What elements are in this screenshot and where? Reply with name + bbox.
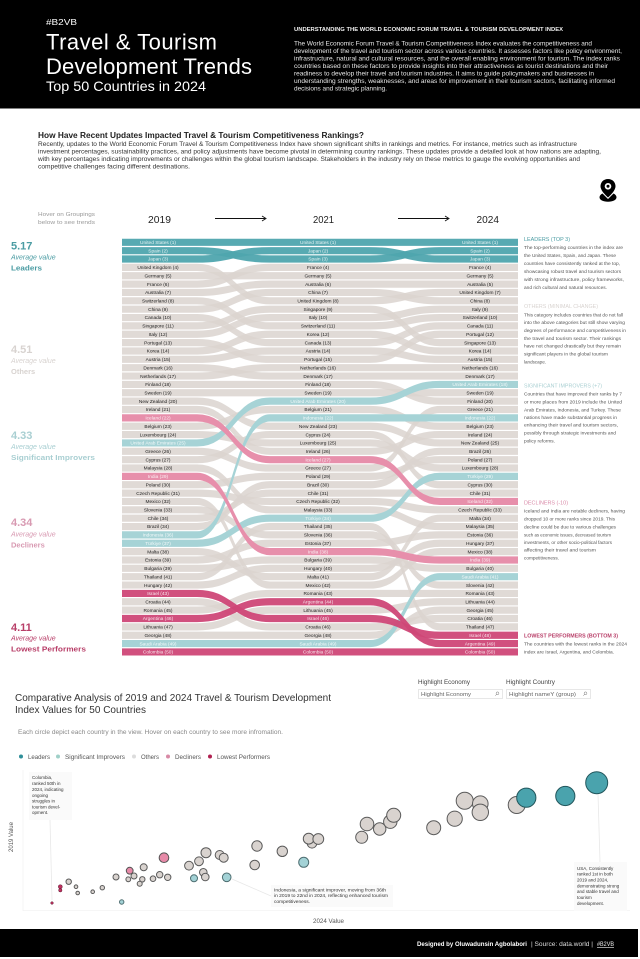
scatter x axis label: 2024 Value xyxy=(313,919,345,925)
callout: Colombia: 2024, indicating xyxy=(32,787,64,792)
note: others: the travel and tourism sector. Their rankings xyxy=(524,336,622,341)
country labels 2024: Malaysia (35) xyxy=(466,524,495,530)
country labels 2019: Cyprus (27) xyxy=(145,457,171,463)
footer banner: Designed by Oluwadunsin Agbolabori xyxy=(417,941,527,948)
hover instruction: below to see trends xyxy=(38,220,95,226)
country labels 2021: United Arab Emirates (20) xyxy=(290,399,346,405)
sankey ribbons: leaders xyxy=(122,242,518,259)
country labels 2021: Belgium (21) xyxy=(304,407,332,413)
note: lowest performers: The countries with the lowest ranks in the 2024 xyxy=(524,641,627,646)
country labels 2024: Lithuania (44) xyxy=(465,600,495,606)
country labels 2019: Sweden (19) xyxy=(144,390,172,396)
country labels 2024: Czech Republic (33) xyxy=(458,508,502,514)
country labels 2019: Estonia (39) xyxy=(145,558,171,564)
country labels 2019: Slovenia (33) xyxy=(144,508,173,514)
country labels 2019: United Arab Emirates (25) xyxy=(130,441,186,447)
country labels 2021: France (4) xyxy=(307,265,329,271)
country labels 2021: Germany (5) xyxy=(305,273,332,279)
country labels 2024: Hungary (37) xyxy=(466,541,494,547)
country labels 2019: Saudi Arabia (49) xyxy=(139,641,177,647)
header intro text: infrastructure, natural and cultural resources, and the overall enabling environment for tourism. The index ranks xyxy=(294,57,620,63)
country labels 2021: Finland (18) xyxy=(305,382,331,388)
section heading and description: investment percentages, sustainability practices, and policy adjustments have become pivotal in determining country rankings. These updates provide a detailed look at how nations are adapting, xyxy=(38,150,601,156)
country labels 2021: Thailand (35) xyxy=(304,524,333,530)
filter: highlight economy: Highlight Economy xyxy=(421,692,471,698)
country labels 2021: Luxembourg (25) xyxy=(300,441,337,447)
country labels 2019: Thailand (41) xyxy=(144,574,173,580)
KPI: lowest performers: Average value xyxy=(10,636,56,642)
country labels 2021: Saudi Arabia (49) xyxy=(299,641,337,647)
year headers with arrows xyxy=(148,214,499,226)
note: decliners: Iceland and India are notable decliners, having xyxy=(524,508,625,513)
scatter legend xyxy=(19,754,270,761)
header intro text: UNDERSTANDING THE WORLD ECONOMIC FORUM TRAVEL & TOURISM DEVELOPMENT INDEX xyxy=(294,27,563,33)
note: leaders: and rich cultural and natural resources. xyxy=(524,285,607,290)
country labels 2024: Austria (15) xyxy=(468,357,493,363)
section heading and description xyxy=(37,131,601,170)
year headers with arrows: 2024 xyxy=(476,214,499,226)
country labels 2019: Georgia (48) xyxy=(145,633,172,639)
note: lowest performers: LOWEST PERFORMERS (BOTTOM 3) xyxy=(524,634,618,640)
country labels 2019: Switzerland (8) xyxy=(142,298,174,304)
scatter legend: Others xyxy=(141,755,159,761)
note: significant improvers: SIGNIFICANT IMPROVERS (+7) xyxy=(524,383,602,389)
country labels 2021: Switzerland (11) xyxy=(301,324,336,330)
country labels 2019: Colombia (50) xyxy=(143,650,173,656)
country labels 2019: Belgium (23) xyxy=(144,424,172,430)
country labels 2021: Canada (13) xyxy=(305,340,332,346)
scatter points: significant improvers xyxy=(120,857,309,904)
note: leaders: countries have consistently ranked at the top, xyxy=(524,261,620,266)
country labels 2019: Romania (45) xyxy=(143,608,173,614)
KPI: leaders: Leaders xyxy=(11,264,42,272)
country labels 2024: Denmark (17) xyxy=(465,374,495,380)
country labels 2021: Mexico (42) xyxy=(305,583,331,589)
country labels 2021: Poland (29) xyxy=(306,474,331,480)
filter: highlight country xyxy=(506,680,590,698)
note: leaders: the United States, Spain, and Japan. These xyxy=(524,253,616,258)
note: others: into the above categories but still show varying xyxy=(524,320,625,325)
country labels 2024: Iceland (32) xyxy=(467,499,493,505)
country labels 2024: United Arab Emirates (18) xyxy=(452,382,508,388)
KPI: significant improvers xyxy=(10,430,95,462)
country labels 2024: Switzerland (10) xyxy=(463,315,498,321)
country labels 2021: Brazil (30) xyxy=(307,482,329,488)
KPI: others: Others xyxy=(11,367,35,376)
country labels 2019: Mexico (32) xyxy=(145,499,171,505)
country labels 2019 xyxy=(130,240,186,656)
country labels 2024: Japan (3) xyxy=(470,257,491,263)
callout: USA: USA, Consistently xyxy=(577,866,614,871)
country labels 2019: Canada (10) xyxy=(145,315,172,321)
country labels 2021: Colombia (50) xyxy=(303,650,333,656)
note: others: landscape. xyxy=(524,360,546,365)
country labels 2019: Argentina (46) xyxy=(143,616,174,622)
KPI: decliners: Average value xyxy=(10,532,56,538)
note: significant improvers: possibly through strategic investments and xyxy=(524,430,616,435)
country labels 2019: Croatia (44) xyxy=(145,600,171,606)
country labels 2019: Finland (18) xyxy=(145,382,171,388)
callout: USA: 2019 and 2024, xyxy=(577,878,608,882)
sankey ribbons: significant improvers xyxy=(122,384,518,644)
country labels 2021: Romania (43) xyxy=(303,591,333,597)
country labels 2019: Malaysia (28) xyxy=(144,466,173,472)
country labels 2021: Singapore (9) xyxy=(303,307,333,313)
header intro text: countries based on these factors to provide insights into their attractiveness as tourist destinations and their xyxy=(294,64,608,70)
country labels 2024: France (4) xyxy=(469,265,491,271)
country labels 2019: New Zealand (20) xyxy=(139,399,177,405)
note: others: significant players in the global tourism xyxy=(524,352,608,357)
note: decliners xyxy=(524,500,625,561)
callout: Colombia: tourism devel- xyxy=(32,804,61,810)
country labels 2024: Cyprus (30) xyxy=(467,482,493,488)
country labels 2021: Denmark (17) xyxy=(303,374,333,380)
country labels 2021: Australia (6) xyxy=(305,282,331,288)
footer banner: #B2VB xyxy=(597,941,614,948)
callout: Colombia: ongoing xyxy=(32,793,49,798)
country labels 2019: Lithuania (47) xyxy=(143,625,173,631)
note: leaders: The top-performing countries in the index are xyxy=(524,245,623,250)
KPI: decliners: 4.34 xyxy=(11,517,33,529)
country labels 2021: Bulgaria (39) xyxy=(304,558,332,564)
callout: USA: development. xyxy=(577,901,604,906)
country labels 2021: Austria (14) xyxy=(306,349,331,355)
country labels 2024: Bulgaria (40) xyxy=(466,566,494,572)
note: others: OTHERS (MINIMAL CHANGE) xyxy=(524,304,598,310)
country labels 2024: China (8) xyxy=(470,298,490,304)
country labels 2019: Netherlands (17) xyxy=(140,374,176,380)
header banner xyxy=(0,0,640,108)
country labels 2024 xyxy=(452,240,508,656)
country labels 2019: Denmark (16) xyxy=(143,365,173,371)
scatter points: leaders xyxy=(517,772,608,807)
country labels 2024: Estonia (36) xyxy=(467,533,493,539)
country labels 2024: Chile (31) xyxy=(470,491,491,497)
country labels 2021: Hungary (40) xyxy=(304,566,332,572)
note: leaders: LEADERS (TOP 3) xyxy=(524,237,570,243)
country labels 2021: Israel (46) xyxy=(307,616,329,622)
country labels 2021: Estonia (37) xyxy=(305,541,331,547)
country labels 2021: Chile (31) xyxy=(308,491,329,497)
country labels 2019: United States (1) xyxy=(140,240,176,246)
country labels 2021: Malaysia (33) xyxy=(304,508,333,514)
country labels 2019: Hungary (42) xyxy=(144,583,172,589)
country labels 2024: Belgium (23) xyxy=(466,424,494,430)
header intro text xyxy=(294,27,622,93)
country labels 2024: Malta (34) xyxy=(469,516,491,522)
country labels 2024: Finland (20) xyxy=(467,399,493,405)
KPI: significant improvers: Average value xyxy=(10,444,56,451)
callout: USA: tourism xyxy=(577,895,592,900)
country labels 2019: Indonesia (36) xyxy=(143,533,174,539)
section heading and description: Recently, updates to the World Economic Forum Travel & Tourism Competitiveness Index have shown significant shifts in rankings and metrics. For instance, metrics such as infrastructure xyxy=(38,142,578,148)
country labels 2021: Sweden (19) xyxy=(304,390,332,396)
country labels 2024: Sweden (19) xyxy=(466,390,494,396)
KPI: decliners: Decliners xyxy=(11,540,45,550)
KPI: others xyxy=(10,344,56,376)
note: significant improvers xyxy=(524,383,622,443)
filter: highlight country: Highlight nameY (group) xyxy=(509,692,576,698)
main title block: Travel & Tourism xyxy=(46,30,217,54)
country labels 2021: Croatia (46) xyxy=(305,625,331,631)
note: decliners: DECLINERS (-10) xyxy=(524,500,568,506)
country labels 2024: Canada (11) xyxy=(467,324,494,330)
KPI: lowest performers: 4.11 xyxy=(11,622,32,634)
sankey ribbons: lowest performers xyxy=(122,593,518,652)
KPI: leaders: 5.17 xyxy=(11,240,32,252)
note: decliners: competitiveness. xyxy=(524,556,559,561)
country labels 2024: Greece (21) xyxy=(467,407,493,413)
country labels 2021: Korea (12) xyxy=(307,332,330,338)
country labels 2019: Poland (30) xyxy=(146,482,171,488)
scatter points: others xyxy=(66,792,525,895)
country labels 2021: China (7) xyxy=(308,290,328,296)
header intro text: The World Economic Forum Travel & Tourism Competitiveness Index evaluates the competitiveness and xyxy=(294,42,592,48)
country labels 2019: India (29) xyxy=(148,474,169,480)
country labels 2021: Portugal (15) xyxy=(304,357,332,363)
hover instruction xyxy=(38,212,95,226)
country labels 2024: Croatia (46) xyxy=(467,616,493,622)
section heading and description: How Have Recent Updates Impacted Travel & Tourism Competitiveness Rankings? xyxy=(38,131,364,140)
filter: highlight economy: Highlight Economy xyxy=(418,680,470,686)
country labels 2021: Netherlands (16) xyxy=(300,365,336,371)
note: lowest performers xyxy=(524,634,627,654)
callout: Indonesia: Indonesia, a significant improver, moving from 36th xyxy=(274,888,387,892)
filter: highlight economy xyxy=(418,680,502,698)
scatter title: Comparative Analysis of 2019 and 2024 Travel & Tourism Development xyxy=(15,692,331,704)
note: leaders: showcasing robust travel and tourism sectors xyxy=(524,269,622,274)
country labels 2021: United States (1) xyxy=(300,240,336,246)
main title block xyxy=(46,17,252,94)
country labels 2019: Brazil (34) xyxy=(147,524,169,530)
country labels 2019: Ireland (21) xyxy=(146,407,171,413)
KPI: lowest performers: Lowest Performers xyxy=(11,644,86,654)
country labels 2021: Czech Republic (32) xyxy=(296,499,340,505)
section heading and description: with key percentages indicating improvements or challenges within the global tourism landscape. Stakeholders in the industry rely on these metrics to gauge the evolving opportunities and xyxy=(37,157,580,163)
country labels 2021: United Kingdom (8) xyxy=(297,298,339,304)
country labels 2024: Mexico (38) xyxy=(467,549,493,555)
country labels 2021: India (38) xyxy=(308,549,329,555)
KPI: significant improvers: Significant Improvers xyxy=(11,453,95,462)
main title block: Top 50 Countries in 2024 xyxy=(46,78,206,94)
country labels 2021: Japan (2) xyxy=(308,248,329,254)
section heading and description: competitive challenges facing different destinations. xyxy=(38,164,190,170)
KPI: leaders: Average value xyxy=(10,254,56,262)
country labels 2019: Luxembourg (24) xyxy=(140,432,177,438)
year headers with arrows: 2021 xyxy=(313,214,334,226)
callout: USA xyxy=(574,862,627,911)
country labels 2021 xyxy=(290,240,346,656)
note: decliners: such as economic issues, decreased tourism xyxy=(524,532,611,537)
main title block: Development Trends xyxy=(46,54,252,79)
note: others xyxy=(524,304,626,365)
callout: Colombia: ranked 50th in xyxy=(32,781,61,786)
country labels 2019: Czech Republic (31) xyxy=(136,491,180,497)
note: others: This category includes countries that do not fall xyxy=(524,312,623,317)
callout: USA: and stable travel and xyxy=(577,889,619,894)
country labels 2024: Romania (43) xyxy=(465,591,495,597)
country labels 2024: Portugal (12) xyxy=(466,332,494,338)
country labels 2024: Georgia (45) xyxy=(467,608,494,614)
footer banner: | Source: data.world | xyxy=(531,941,593,948)
country labels 2021: Argentina (44) xyxy=(303,600,334,606)
country labels 2019: United Kingdom (4) xyxy=(137,265,179,271)
country labels 2019: Japan (3) xyxy=(148,257,169,263)
country labels 2019: Malta (38) xyxy=(147,549,169,555)
KPI: others: Average value xyxy=(10,358,56,365)
filter: highlight country: Highlight Country xyxy=(506,680,555,686)
country labels 2024: India (39) xyxy=(470,558,491,564)
note: others: have not changed drastically but they remain xyxy=(524,344,621,349)
country labels 2019: Iceland (22) xyxy=(145,416,171,422)
country labels 2024: Türkiye (29) xyxy=(467,474,493,480)
icon: map pin xyxy=(600,179,616,202)
note: leaders: with strong infrastructure, policy frameworks, xyxy=(524,277,624,282)
country labels 2019: Australia (7) xyxy=(145,290,171,296)
KPI: decliners xyxy=(10,517,56,550)
country labels 2019: Korea (14) xyxy=(147,349,170,355)
country labels 2021: Ireland (26) xyxy=(306,449,331,455)
KPI: significant improvers: 4.33 xyxy=(11,430,32,442)
callout: USA: demonstrating strong xyxy=(577,884,620,888)
country labels 2019: Italy (12) xyxy=(149,332,168,338)
country labels 2019: Greece (26) xyxy=(145,449,171,455)
country labels 2024: Singapore (13) xyxy=(464,340,496,346)
country labels 2024: Israel (48) xyxy=(469,633,491,639)
country labels 2019: Portugal (13) xyxy=(144,340,172,346)
country labels 2024: Poland (27) xyxy=(468,457,493,463)
note: leaders xyxy=(524,237,624,290)
callout: Colombia: opment. xyxy=(32,810,48,815)
country labels 2024: Argentina (49) xyxy=(465,641,496,647)
footer banner xyxy=(0,929,638,957)
country labels 2024: Colombia (50) xyxy=(465,650,495,656)
country labels 2019: Singapore (11) xyxy=(142,324,174,330)
country labels 2021: Türkiye (34) xyxy=(305,516,331,522)
callout: Indonesia xyxy=(271,885,393,907)
callout: Colombia xyxy=(29,772,72,820)
country labels 2024: Slovenia (42) xyxy=(466,583,495,589)
country labels 2021: Slovenia (36) xyxy=(304,533,333,539)
country labels 2024: Thailand (47) xyxy=(466,625,495,631)
country labels 2024: Italy (9) xyxy=(472,307,488,313)
scatter title xyxy=(15,692,331,716)
country labels 2021: Spain (3) xyxy=(308,257,328,263)
callout: Indonesia: competitiveness. xyxy=(274,899,310,904)
country labels 2021: Greece (27) xyxy=(305,466,331,472)
callout: Colombia: Colombia, xyxy=(32,775,52,780)
country labels 2024: Australia (5) xyxy=(467,282,493,288)
country labels 2024: Netherlands (16) xyxy=(462,365,498,371)
header intro text: readiness to develop their travel and tourism industries. It aims to guide policymakers and businesses in xyxy=(294,72,594,78)
country labels 2021: New Zealand (23) xyxy=(299,424,337,430)
country labels 2024: Germany (5) xyxy=(467,273,494,279)
note: decliners: investments, or other socio-political factors xyxy=(524,540,613,545)
scatter description: Each circle depict each country in the view. Hover on each country to see more infromation. xyxy=(18,730,283,736)
note: significant improvers: nations have made substantial progress in xyxy=(524,415,617,420)
country labels 2021: Indonesia (22) xyxy=(303,416,334,422)
note: significant improvers: Countries that have improved their ranks by 7 xyxy=(524,391,622,396)
country labels 2021: Iceland (27) xyxy=(305,457,331,463)
country labels 2024: New Zealand (25) xyxy=(461,441,499,447)
country labels 2024: United States (1) xyxy=(462,240,498,246)
header intro text: decisions and strategic planning. xyxy=(294,87,387,93)
country labels 2021: Cyprus (24) xyxy=(305,432,331,438)
note: others: degrees of performance and competitiveness in xyxy=(524,328,626,333)
scatter points: decliners xyxy=(126,853,169,874)
country labels 2019: Chile (34) xyxy=(148,516,169,522)
scatter legend: Lowest Performers xyxy=(217,755,270,761)
note: significant improvers: or more places from 2019 include the United xyxy=(524,399,622,404)
country labels 2024: United Kingdom (7) xyxy=(459,290,501,296)
note: lowest performers: index are Israel, Argentina, and Colombia. xyxy=(524,649,614,654)
country labels 2024: Ireland (24) xyxy=(468,432,493,438)
note: decliners: decline could be due to various challenges xyxy=(524,524,617,529)
KPI: lowest performers xyxy=(10,622,86,654)
scatter plot frame xyxy=(23,770,630,911)
country labels 2019: Spain (2) xyxy=(148,248,168,254)
country labels 2019: Israel (43) xyxy=(147,591,169,597)
country labels 2021: Lithuania (45) xyxy=(303,608,333,614)
scatter legend: Leaders xyxy=(28,755,50,761)
country labels 2019: Austria (15) xyxy=(146,357,171,363)
header intro text: understanding strengths, weaknesses, and areas for improvement in their tourism sectors, facilitating informed xyxy=(294,79,615,85)
scatter legend: Significant Improvers xyxy=(65,755,125,761)
year headers with arrows: 2019 xyxy=(148,214,171,226)
scatter legend: Decliners xyxy=(175,755,201,761)
sankey ribbons: decliners xyxy=(122,418,518,560)
scatter points: lowest performers xyxy=(51,885,62,904)
country labels 2019: Türkiye (37) xyxy=(145,541,171,547)
scatter y axis label: 2019 Value xyxy=(9,821,15,852)
country labels 2024: Luxembourg (28) xyxy=(462,466,499,472)
country labels 2024: Spain (2) xyxy=(470,248,490,254)
note: decliners: dropped 10 or more ranks since 2019. This xyxy=(524,516,616,521)
hover instruction: Hover on Groupings xyxy=(38,212,95,218)
country labels 2024: Brazil (26) xyxy=(469,449,491,455)
country labels 2019: Bulgaria (39) xyxy=(144,566,172,572)
country labels 2019: China (9) xyxy=(148,307,168,313)
country labels 2021: Malta (41) xyxy=(307,574,329,580)
note: significant improvers: enhancing their travel and tourism sectors, xyxy=(524,423,618,428)
sankey ribbons: others xyxy=(122,267,518,635)
country labels 2021: Georgia (48) xyxy=(305,633,332,639)
callout: Indonesia: in 2019 to 22nd in 2024, reflecting enhanced tourism xyxy=(274,893,388,898)
main title block: #B2VB xyxy=(46,17,77,27)
KPI: leaders xyxy=(10,240,56,272)
header intro text: development of the travel and tourism sector across various countries. It assesses factors like policy environment, xyxy=(294,49,622,55)
country labels 2024: Korea (14) xyxy=(469,349,492,355)
note: significant improvers: Arab Emirates, Indonesia, and Turkey. These xyxy=(524,407,621,412)
note: decliners: affecting their travel and tourism xyxy=(524,548,596,553)
callout leader lines xyxy=(50,794,600,900)
country labels 2024: Saudi Arabia (41) xyxy=(461,574,499,580)
country labels 2021: Italy (10) xyxy=(309,315,328,321)
country labels 2019: Germany (5) xyxy=(145,273,172,279)
KPI: others: 4.51 xyxy=(11,344,32,356)
callout: USA: ranked 1st in both xyxy=(577,872,613,876)
note: significant improvers: policy reforms. xyxy=(524,438,555,443)
scatter title: Index Values for 50 Countries xyxy=(15,704,146,716)
callout: Colombia: struggles in xyxy=(32,798,56,804)
country labels 2024: Indonesia (22) xyxy=(465,416,496,422)
country labels 2019: France (6) xyxy=(147,282,169,288)
